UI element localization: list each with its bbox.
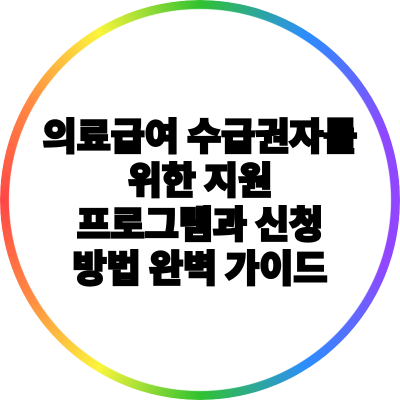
title: 방법 완벽 가이드 [73,248,327,290]
title: 프로그램과 신청 [77,204,323,246]
title: 위한 지원 [128,160,272,202]
title: 의료급여 수급권자를 [43,116,357,158]
